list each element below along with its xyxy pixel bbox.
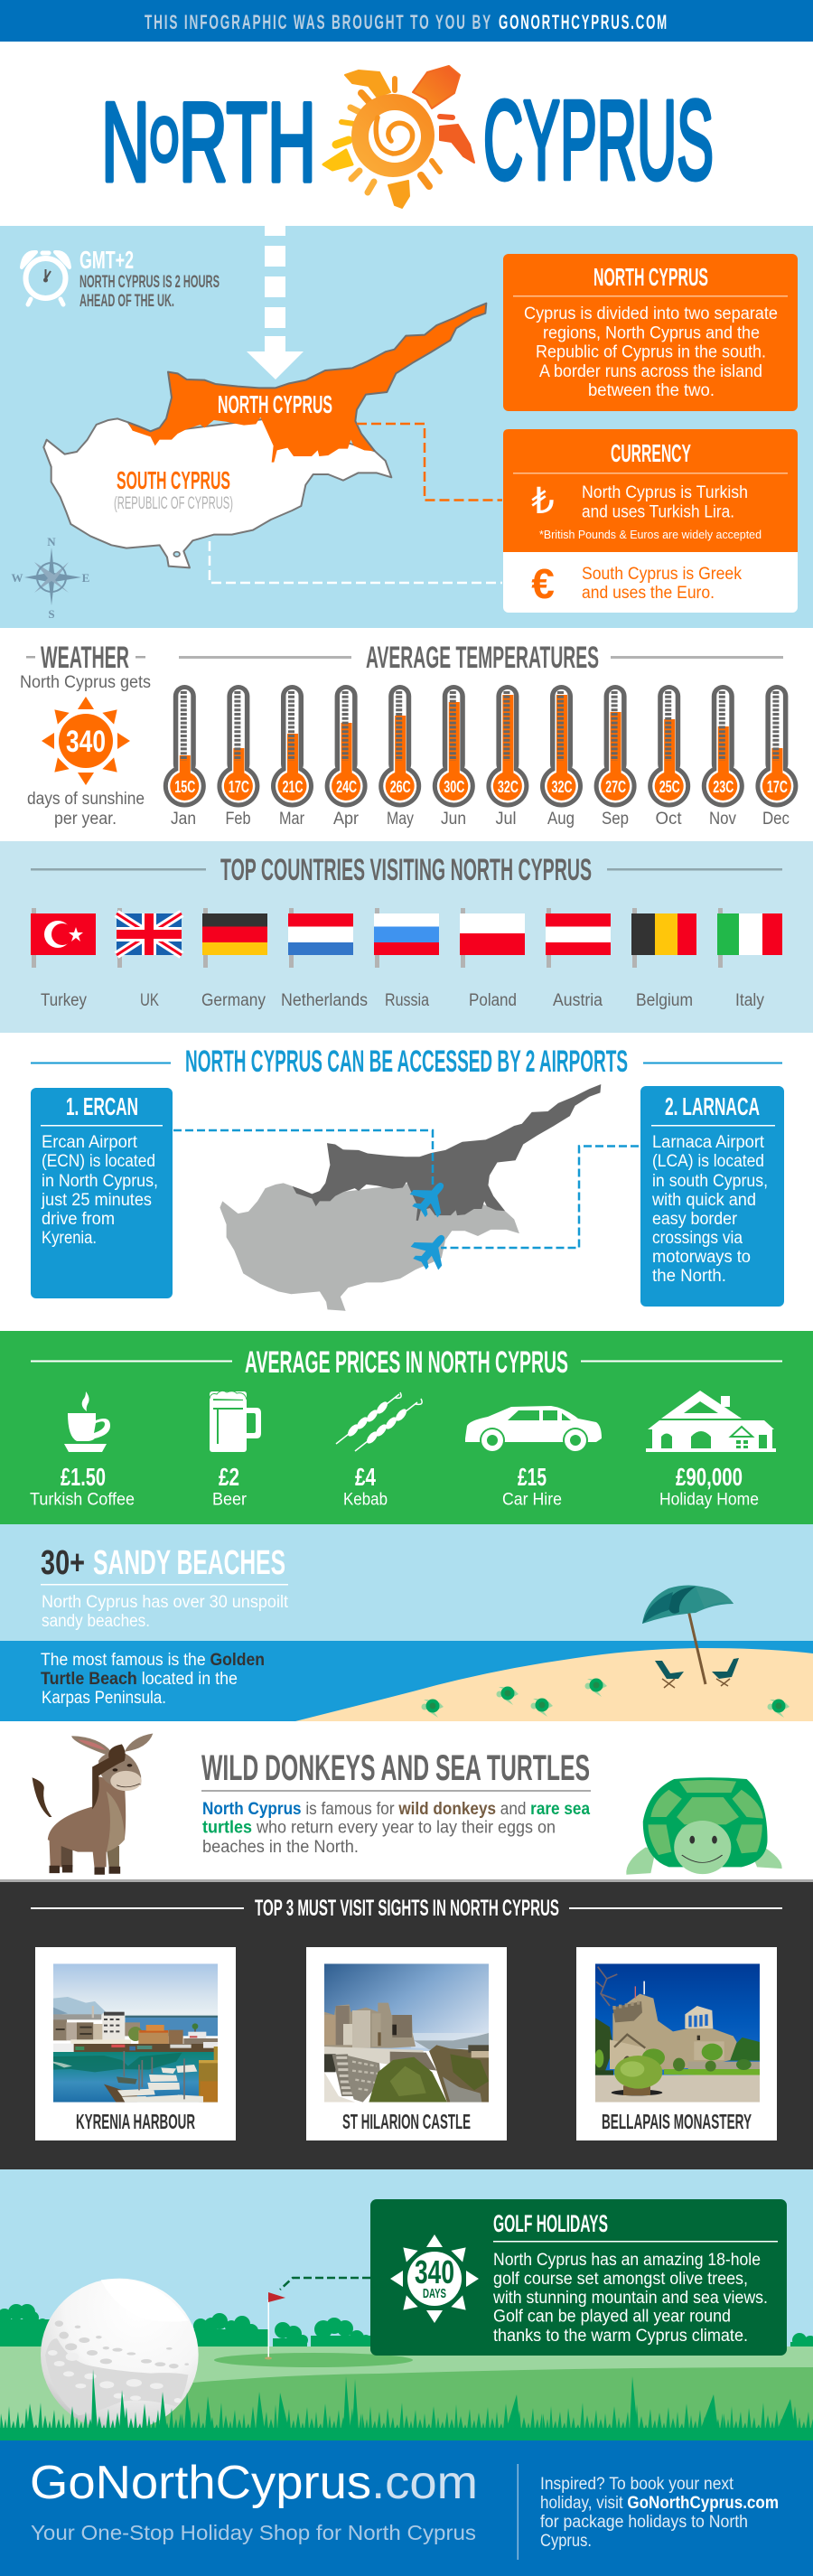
panel: weather (0, 628, 813, 841)
text: donkeys and turtles: North Cyprus is famous for wild donkeys and rare sea (202, 1800, 590, 1819)
heading: donkeys and turtles: WILD DONKEYS AND SEA TURTLES (201, 1748, 590, 1788)
icon: beer (210, 1391, 261, 1452)
chart: monthly thermometers: 21C (282, 778, 304, 796)
panel: Larnaca: motorways to (652, 1248, 751, 1267)
text: donkeys and turtles: beaches in the North. (202, 1838, 359, 1857)
icon: sun 340 days: 340 (415, 2253, 454, 2290)
text: Golden Turtle Beach: The most famous is the Golden (41, 1651, 265, 1670)
heading: beaches: SANDY BEACHES (93, 1544, 285, 1582)
panel: Larnaca (640, 1086, 784, 1307)
country labels (41, 991, 764, 1010)
illustration: parasol and chairs (642, 1585, 739, 1688)
month labels (171, 810, 790, 829)
top banner (0, 0, 813, 42)
text: golf description: with stunning mountain and sea views. (492, 2289, 768, 2308)
icon: plane Ercan (405, 1172, 456, 1223)
chart: monthly thermometers: 23C (713, 778, 734, 796)
text: beach count (42, 1593, 289, 1631)
illustration: sea turtle (626, 1777, 782, 1875)
connector: Ercan (173, 1130, 433, 1185)
country labels: Russia (385, 991, 429, 1010)
text: Golden Turtle Beach: Karpas Peninsula. (42, 1689, 166, 1708)
panel: Larnaca: (LCA) is located (652, 1152, 764, 1171)
map: Cyprus regions: (REPUBLIC OF CYPRUS) (114, 494, 233, 513)
heading: weather: WEATHER (41, 641, 129, 675)
flag: Turkey (31, 913, 96, 955)
icon: sun with 340 (42, 697, 130, 785)
logo: North Cyprus (0, 42, 813, 226)
illustration: tree line (0, 2304, 813, 2348)
panel: Ercan: Ercan Airport (42, 1133, 138, 1152)
card: Bellapais Monastery (576, 1947, 777, 2140)
panel: average prices (0, 1331, 813, 1524)
panel: North Cyprus info: A border runs across the island (539, 362, 762, 381)
country labels: Netherlands (281, 991, 368, 1010)
prices and labels: £4 (355, 1463, 376, 1491)
flag: Germany (202, 913, 267, 955)
map: Cyprus regions (43, 304, 486, 567)
icon: compass: S (48, 607, 55, 621)
icon: euro symbol: € (531, 560, 555, 607)
panel: North Cyprus info (503, 254, 798, 411)
text: sunshine days: days of sunshine (27, 790, 145, 809)
country labels: Poland (469, 991, 517, 1010)
chart: monthly thermometers (164, 685, 798, 808)
map: airports (220, 1084, 601, 1311)
month labels: Sep (602, 810, 629, 829)
panel: Larnaca: easy border (652, 1210, 738, 1229)
icon: compass: N (47, 535, 56, 548)
photo: monastery (594, 1963, 760, 2103)
country labels: Turkey (41, 991, 87, 1010)
country labels: Austria (553, 991, 603, 1010)
chart: monthly thermometers: 17C (767, 778, 788, 796)
logo: North Cyprus: RTH (179, 80, 316, 205)
icon: plane Larnaca (406, 1224, 457, 1276)
prices and labels (30, 1463, 759, 1509)
flag poles (32, 908, 723, 968)
icon: sun 340 days (390, 2234, 479, 2323)
illustration: golf ball (41, 2279, 199, 2431)
icon: lira symbol: ₺ (531, 481, 555, 522)
panel: Larnaca: the North. (652, 1267, 726, 1286)
footer (0, 2440, 813, 2576)
panel: Ercan: (ECN) is located (42, 1152, 155, 1171)
month labels: Feb (226, 810, 251, 829)
time zone text: GMT+2 (79, 246, 134, 274)
panel: Ercan: in North Cyprus, (42, 1172, 158, 1191)
connector: south to currency (210, 541, 502, 583)
text: booking call to action: Inspired? To book your next (540, 2475, 734, 2494)
flag: Belgium (631, 913, 696, 955)
chart: monthly thermometers: 24C (336, 778, 357, 796)
panel: North Cyprus info: between the two. (588, 381, 715, 400)
flag: Poland (460, 913, 525, 955)
text: golf description: golf course set amongst olive trees, (493, 2270, 748, 2289)
panel: currency (503, 429, 798, 613)
text: Golden Turtle Beach (41, 1651, 265, 1708)
panel: Larnaca: in south Cyprus, (652, 1172, 768, 1191)
month labels: May (387, 810, 414, 829)
panel: currency: CURRENCY (611, 439, 691, 467)
panel: currency: and uses the Euro. (582, 584, 715, 603)
card: St Hilarion Castle: ST HILARION CASTLE (342, 2110, 471, 2133)
icon: small turtles (421, 1679, 790, 1718)
tagline: Your One-Stop Holiday Shop for North Cyprus (31, 2521, 476, 2544)
text: golf description: North Cyprus has an amazing 18-hole (493, 2251, 761, 2270)
month labels: Apr (333, 810, 360, 829)
panel: currency: and uses Turkish Lira. (582, 502, 734, 522)
panel: wild donkeys and sea turtles (0, 1721, 813, 1882)
flag: Austria (546, 913, 611, 955)
time zone text: AHEAD OF THE UK. (79, 292, 174, 311)
text: golf description (492, 2251, 768, 2346)
logo: North Cyprus: N (101, 80, 182, 205)
heading: beaches (41, 1544, 288, 1585)
icon: sun with 340: 340 (66, 725, 106, 759)
country labels: Belgium (636, 991, 693, 1010)
heading: golf holidays: GOLF HOLIDAYS (493, 2210, 608, 2237)
card: St Hilarion Castle (306, 1947, 507, 2140)
flag: Russia (374, 913, 439, 955)
text: booking call to action: for package holidays to North (540, 2513, 748, 2532)
heading: sights: TOP 3 MUST VISIT SIGHTS IN NORTH CYPRUS (255, 1896, 559, 1921)
card: Kyrenia Harbour: KYRENIA HARBOUR (76, 2110, 195, 2133)
panel: currency: North Cyprus is Turkish (582, 483, 748, 502)
month labels: Dec (762, 810, 790, 829)
panel: North Cyprus info: regions, North Cyprus and the (543, 323, 760, 343)
month labels: Jun (441, 810, 466, 829)
chart: monthly thermometers: 15C (174, 778, 195, 796)
text: booking call to action: Cyprus. (540, 2532, 592, 2551)
icon: compass: E (82, 571, 89, 585)
prices and labels: Kebab (343, 1491, 388, 1509)
prices and labels: £15 (518, 1463, 547, 1491)
connector: north to currency (357, 424, 502, 501)
fairway (0, 2347, 813, 2440)
icon: alarm clock (22, 252, 70, 304)
top banner: THIS INFOGRAPHIC WAS BROUGHT TO YOU BY (145, 11, 492, 33)
map: Cyprus regions: SOUTH CYPRUS (117, 466, 230, 494)
putting green (214, 2353, 413, 2367)
chart: monthly thermometers: 32C (498, 778, 519, 796)
month labels: Mar (279, 810, 305, 829)
illustration: grass (0, 2369, 813, 2440)
country labels: UK (140, 991, 159, 1010)
text: sunshine days (27, 790, 145, 829)
connector: flag to panel (280, 2278, 370, 2290)
prices and labels: £90,000 (676, 1463, 743, 1491)
flag: Italy (717, 913, 782, 955)
panel: Ercan: Kyrenia. (42, 1229, 97, 1248)
panel: Larnaca: crossings via (652, 1229, 743, 1248)
icon: sun 340 days: DAYS (423, 2286, 446, 2301)
chart: monthly thermometers: 27C (605, 778, 626, 796)
text: beach count: sandy beaches. (42, 1612, 150, 1631)
prices and labels: £2 (219, 1463, 239, 1491)
icon: kebab (336, 1392, 422, 1451)
panel: golf holidays (0, 2169, 813, 2440)
card: Kyrenia Harbour (35, 1947, 236, 2140)
text: beach count: North Cyprus has over 30 unspoilt (42, 1593, 289, 1612)
flag and pin (265, 2292, 285, 2360)
time zone text (79, 246, 220, 311)
month labels: Jul (495, 810, 517, 829)
photo: castle (324, 1963, 489, 2103)
beach sand (295, 1648, 813, 1721)
text: golf description: thanks to the warm Cyprus climate. (493, 2327, 748, 2346)
text: golf description: Golf can be played all year round (493, 2308, 731, 2326)
panel: Larnaca: with quick and (651, 1191, 756, 1210)
country labels: Italy (735, 991, 764, 1010)
text: booking call to action: holiday, visit GoNorthCyprus.com (540, 2494, 779, 2513)
panel: golf info (370, 2199, 787, 2356)
flag: Netherlands (288, 913, 353, 955)
prices and labels: Beer (212, 1491, 248, 1509)
text: donkeys and turtles (202, 1800, 590, 1857)
panel: currency: South Cyprus is Greek (582, 565, 742, 584)
icon: compass: W (11, 571, 23, 585)
panel: North Cyprus info: Republic of Cyprus in the south. (536, 343, 766, 361)
heading: beaches: 30+ (41, 1544, 85, 1582)
heading: weather (26, 641, 145, 675)
panel: Ercan: 1. ERCAN (66, 1092, 138, 1120)
logo: North Cyprus: O (150, 106, 179, 174)
time zone text: NORTH CYPRUS IS 2 HOURS (79, 273, 220, 292)
icon: coffee (64, 1391, 110, 1452)
heading: average temperatures (179, 641, 783, 675)
panel: currency: *British Pounds & Euros are widely accepted (539, 529, 762, 541)
chart: monthly thermometers: 26C (390, 778, 411, 796)
heading: prices: AVERAGE PRICES IN NORTH CYPRUS (245, 1345, 568, 1380)
panel: Larnaca: Larnaca Airport (652, 1133, 765, 1152)
map: Cyprus regions: NORTH CYPRUS (218, 390, 332, 418)
chart: monthly thermometers: 25C (659, 778, 680, 796)
panel: sandy beaches (0, 1524, 813, 1721)
icon: house (646, 1391, 776, 1452)
month labels: Aug (547, 810, 575, 829)
text: Golden Turtle Beach: Turtle Beach located in the (41, 1670, 238, 1689)
icon: car (465, 1406, 602, 1453)
month labels: Nov (709, 810, 736, 829)
icon: compass (11, 535, 89, 621)
connector: Larnaca (441, 1146, 639, 1248)
prices and labels: Car Hire (502, 1491, 562, 1509)
icon: dashed arrow (247, 226, 304, 379)
logo text: GoNorthCyprus.com: GoNorthCyprus .com (30, 2457, 478, 2509)
panel: Ercan: just 25 minutes (41, 1191, 152, 1210)
panel: North Cyprus info: NORTH CYPRUS (593, 263, 708, 291)
panel: airports (0, 1033, 813, 1331)
text: sunshine intro: North Cyprus gets (20, 673, 151, 692)
prices and labels: £1.50 (61, 1463, 106, 1491)
prices and labels: Turkish Coffee (30, 1491, 135, 1509)
country labels: Germany (201, 991, 266, 1010)
panel: map and overview (0, 226, 813, 628)
panel: North Cyprus info: Cyprus is divided into two separate (524, 304, 778, 323)
illustration: donkey (33, 1734, 153, 1875)
top banner: GONORTHCYPRUS.COM (499, 11, 668, 33)
panel: top 3 sights (0, 1879, 813, 2169)
heading: average temperatures: AVERAGE TEMPERATURES (366, 641, 599, 675)
chart: monthly thermometers: 30C (444, 778, 464, 796)
photo: harbour (53, 1963, 218, 2103)
text: booking call to action (540, 2475, 779, 2551)
chart: monthly thermometers: 17C (229, 778, 249, 796)
month labels: Jan (171, 810, 196, 829)
flag: UK (117, 913, 182, 955)
rough (90, 2367, 813, 2440)
chart: monthly thermometers: 32C (551, 778, 573, 796)
text: donkeys and turtles: turtles who return every year to lay their eggs on (202, 1818, 556, 1838)
text: sunshine days: per year. (54, 810, 117, 829)
panel: Ercan: drive from (42, 1210, 115, 1229)
prices and labels: Holiday Home (659, 1491, 759, 1509)
panel: top countries (0, 841, 813, 1033)
month labels: Oct (656, 810, 682, 829)
icon: sun turtle (323, 66, 474, 208)
panel: Ercan (31, 1088, 173, 1298)
